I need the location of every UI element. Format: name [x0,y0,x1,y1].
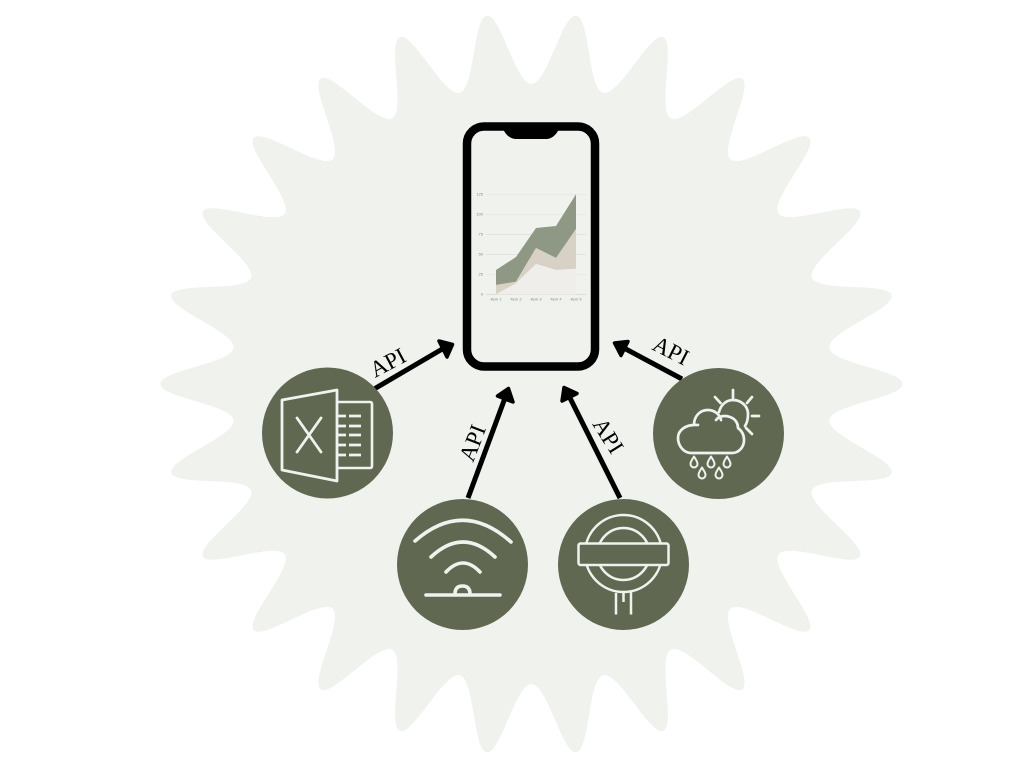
cloud [678,410,744,453]
area chart [476,192,586,302]
rain drops [690,456,730,478]
chart gridlines [486,194,586,294]
y axis labels [476,192,484,297]
excel cover [282,390,337,481]
label: API weather: API [649,331,693,370]
y axis labels: 0 [481,292,484,297]
x axis labels [490,296,582,302]
y axis labels: 125 [476,192,484,197]
label: API underground: API [588,413,629,458]
excel X [297,418,321,452]
phone [467,126,595,366]
wifi base [426,586,500,595]
label: API wifi: API [454,421,491,465]
label: API excel: API [366,343,410,382]
excel sheet [338,402,372,468]
y axis labels: 100 [476,212,484,217]
arrow: underground to phone [562,388,620,498]
area series tan [496,229,576,294]
y axis labels: 25 [479,272,484,277]
roundel rings [585,515,662,592]
icon: excel [262,368,393,498]
x axis labels: Item 3 [530,296,542,302]
roundel stand [616,592,631,614]
phone notch [503,129,559,139]
icon: weather [653,368,784,499]
x axis labels: Item 4 [550,296,562,302]
area series dark [496,194,576,285]
roundel circle [558,499,689,630]
sun rays [715,390,759,434]
x axis labels: Item 2 [510,296,522,302]
y axis labels: 50 [479,252,484,257]
arrow: excel to phone [375,341,452,388]
area series light [496,264,576,294]
icon: underground roundel [558,499,689,630]
arrow: wifi to phone [468,388,513,498]
phone body [467,126,595,366]
wifi arcs [415,520,511,572]
excel circle [262,368,393,498]
arrow: weather to phone [614,342,682,379]
starburst background [160,11,903,757]
y axis labels: 75 [479,232,484,237]
excel rows [338,416,361,455]
sun [719,400,748,426]
weather circle [653,368,784,499]
x axis labels: Item 1 [490,296,502,302]
wifi circle [397,499,528,630]
icon: wifi [397,499,528,630]
x axis labels: Item 5 [570,296,582,302]
roundel bar [578,544,668,565]
